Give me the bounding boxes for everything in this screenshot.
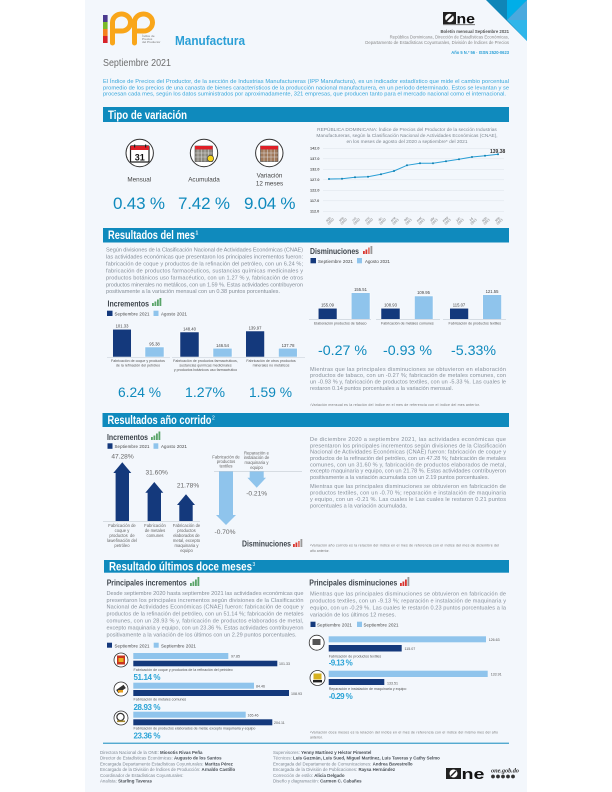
legend bbox=[108, 443, 188, 449]
arrow chart: accumulated decreases: equipo bbox=[250, 465, 263, 470]
section band: Tipo de variación bbox=[103, 107, 509, 122]
monthly increase values: 1.27% bbox=[185, 384, 225, 400]
arrow chart: accumulated decreases bbox=[212, 450, 302, 536]
text: twelve month decreases bbox=[310, 591, 507, 618]
legend: Septiembre 2021 bbox=[114, 312, 150, 316]
heading: Principales disminuciones: Principales disminuciones bbox=[309, 577, 397, 587]
line chart: price index: 137.0 bbox=[310, 157, 320, 161]
bar chart: twelve month increases: Fabricación de coque y productos de la refinación del petróleo bbox=[134, 668, 233, 672]
credits: left column: Director de Estadísticas Económicas: Augusto de los Santos bbox=[100, 756, 222, 761]
date: Septiembre 2021 bbox=[103, 58, 171, 69]
bar chart: monthly increases: sustancias químicas medicinales bbox=[179, 364, 232, 368]
credits: right column: Supervisores: Yenny Martínez y Héctor Pimentel bbox=[273, 750, 371, 755]
footnote 3 bbox=[310, 730, 498, 740]
line chart: price index: 117.0 bbox=[310, 199, 319, 203]
heading: Incrementos: Incrementos bbox=[108, 298, 149, 308]
line chart: price index: jun bbox=[455, 216, 461, 222]
bar chart: monthly decreases: 155.09 bbox=[321, 302, 335, 308]
bulletin information: República Dominicana, Dirección de Estadísticas Económicas, bbox=[390, 34, 509, 40]
monthly increase values bbox=[118, 384, 292, 400]
footnote 3: anterior. bbox=[310, 736, 323, 740]
text: accumulated results: y equipo, con un -0.21 %. Las cuales le Las cuales le restaron 0.21 puntos bbox=[310, 497, 506, 503]
arrow chart: accumulated decreases: Fabricación de bbox=[212, 454, 240, 460]
footnote 2 bbox=[310, 544, 499, 553]
monthly decrease values: -0.27 % bbox=[318, 342, 367, 358]
variation values: 7.42 % bbox=[178, 194, 230, 213]
line chart: price index: 2021 bbox=[392, 218, 400, 226]
line chart: price index: ene bbox=[390, 216, 397, 223]
text: monthly decreases: un -0.93 % y, fabricación de productos textiles, con un -5.33 %. Las cuales le bbox=[310, 380, 506, 386]
text: monthly increases: fabricación de productos farmacéuticos, sustancias químicas medicinales y bbox=[106, 269, 303, 275]
heading: Principales incrementos: Principales incrementos bbox=[107, 578, 187, 588]
bar chart: twelve month increases: 84.46 bbox=[256, 684, 265, 688]
text: monthly increases: las actividades económicas que presentaron los principales incrementos fueron: bbox=[106, 255, 303, 261]
legend bbox=[107, 311, 188, 316]
arrow chart: accumulated increases: productos de bbox=[109, 533, 135, 538]
bar chart: monthly increases: Fabricación de productos farmacéuticos, bbox=[173, 359, 238, 363]
text: twelve month increases: Nacional de Actividades Económicas (CNAE) fueron: fabricación de coque y bbox=[106, 605, 304, 611]
text: twelve month increases: excepto maquinaria y equipo, con un 23.36 %. Estas actividades contribuyeron bbox=[106, 625, 304, 631]
text: twelve month decreases: variación de los últimos 12 meses. bbox=[310, 612, 396, 618]
text: monthly decreases: restaron 0.14 puntos porcentuales a la variación mensual. bbox=[310, 386, 453, 392]
arrow chart: accumulated increases: productos bbox=[177, 528, 196, 533]
bar chart: monthly increases: de la refinación del petróleo bbox=[116, 364, 160, 368]
line chart: price index: jul bbox=[469, 217, 474, 222]
credits: right column: Encargada del Departamento de Comunicaciones: Andrea Bavestrello bbox=[273, 761, 413, 766]
heading: Disminuciones: Disminuciones bbox=[242, 539, 291, 549]
variation labels: Variación bbox=[257, 172, 283, 180]
bulletin information bbox=[365, 29, 510, 55]
variation labels: Mensual bbox=[127, 176, 151, 184]
text: twelve month increases: presentaron los principales incrementos según divisiones de la Clasificación bbox=[106, 598, 304, 604]
website and social icons: one.gob.do bbox=[491, 768, 519, 774]
bar chart: monthly increases: 137.78 bbox=[282, 343, 295, 348]
line chart: price index bbox=[310, 126, 506, 226]
line chart: price index: 2020 bbox=[366, 218, 374, 226]
arrow chart: accumulated increases: de metales bbox=[145, 528, 165, 533]
ONE logo bbox=[443, 10, 475, 26]
variation values: 0.43 % bbox=[113, 194, 165, 213]
line chart: price index: 2020 bbox=[353, 218, 361, 226]
line chart: price index: may bbox=[442, 216, 449, 223]
bar chart: monthly increases: 139.97 bbox=[249, 326, 262, 330]
footer ONE logo: ne bbox=[462, 766, 484, 783]
credits: left column: Coordinador de Estadísticas Coyunturales: bbox=[100, 773, 183, 778]
text: monthly decreases: productos de tabaco, con un -0.27 %; fabricación de metales comunes, con bbox=[310, 373, 506, 379]
text: accumulated results bbox=[310, 437, 507, 510]
bar chart: monthly increases: y productos botánicos uso farmacéutico bbox=[174, 368, 237, 372]
arrow chart: accumulated increases: Fabricación de bbox=[108, 523, 136, 528]
variation values bbox=[113, 194, 296, 213]
line chart: price index: en los meses de agosto del 2020 a septiembre* del 2021 bbox=[346, 139, 468, 145]
legend bbox=[310, 622, 399, 628]
section band: Resultados del mes bbox=[103, 228, 509, 242]
bar chart: twelve month increases: 23.36 % bbox=[134, 731, 160, 740]
legend: Septiembre 2021 bbox=[364, 623, 399, 628]
arrow chart: accumulated decreases: textiles bbox=[219, 464, 233, 469]
icon: falling bars bbox=[400, 577, 409, 586]
footnote 2: año anterior. bbox=[310, 549, 330, 553]
line chart: price index: 2021 bbox=[405, 218, 413, 226]
intro text: procesan cada mes, según los datos suministrados por aproximadamente, 321 empresas, que producen tanto para el mercado nacional como el internacional. bbox=[103, 92, 506, 98]
arrow chart: accumulated increases: Fabricación de bbox=[173, 523, 201, 528]
text: accumulated results: positivamente a la variación acumulada con un 2.19 puntos porcentuales. bbox=[310, 475, 489, 481]
bar chart: monthly increases: 148.40 bbox=[183, 326, 197, 332]
bar chart: twelve month decreases: 115.07 bbox=[404, 647, 415, 651]
section band: Resultado últimos doce meses: Resultado últimos doce meses bbox=[109, 559, 252, 573]
credits: right column: Encargada de la División de Publicaciones: Raysa Hernández bbox=[273, 767, 396, 772]
heading: Disminuciones: Disminuciones bbox=[310, 246, 359, 256]
legend: Agosto 2021 bbox=[161, 444, 188, 449]
bar chart: monthly increases: 146.54 bbox=[216, 343, 230, 348]
line chart: price index: 142.0 bbox=[310, 146, 320, 150]
arrow chart: accumulated increases: petróleo bbox=[114, 543, 130, 548]
line chart: price index: dic bbox=[377, 216, 383, 222]
bar chart: monthly decreases: 121.55 bbox=[486, 289, 499, 294]
bar chart: twelve month increases: 101.33 bbox=[279, 662, 290, 666]
credits: right column: Corrección de estilo: Alicia Delgado bbox=[273, 773, 345, 778]
footnote 3: ³Variación doce meses es la relación del índice en el mes de referencia con el índice del mismo mes del año bbox=[310, 730, 498, 734]
bar chart: monthly decreases: 108.93 bbox=[384, 302, 398, 308]
line chart: price index: 2021 bbox=[431, 218, 439, 226]
section band: Resultados del mes: Resultados del mes bbox=[108, 228, 195, 242]
credits: left column: Encargada Departamento Estadísticas Coyunturales: Maritza Pérez bbox=[100, 761, 234, 766]
bar chart: monthly decreases bbox=[309, 287, 506, 325]
icon: 12 month calendar bbox=[256, 139, 283, 167]
bar chart: monthly decreases: 155.51 bbox=[354, 287, 368, 292]
line chart: price index: feb bbox=[403, 216, 409, 222]
text: monthly increases bbox=[106, 248, 303, 295]
bar chart: twelve month increases: 108.93 bbox=[291, 692, 302, 696]
text: monthly increases: Según divisiones de la Clasificación Nacional de Actividades Económicas (CNAE) bbox=[106, 248, 303, 254]
section band: Resultado últimos doce meses bbox=[104, 559, 509, 573]
bar chart: monthly decreases: 115.07 bbox=[453, 302, 466, 308]
text: accumulated results: presentaron los principales incrementos según divisiones de la Clasificación bbox=[310, 443, 506, 449]
bar chart: monthly increases: 95.38 bbox=[149, 342, 160, 346]
icon: falling bars bbox=[363, 246, 372, 254]
bulletin information: Departamento de Estadísticas Coyunturales, División de Índices de Precios bbox=[365, 40, 509, 45]
line chart: price index: sep bbox=[494, 216, 501, 223]
text: accumulated results: productos de la refinación del petróleo, con un 47.28 %; fabricación de metales bbox=[310, 456, 506, 462]
footnote 2: ²Variación año corrido es la relación del índice en el mes de referencia con el índice del mes de diciembre del bbox=[310, 544, 499, 548]
text: accumulated results: De diciembre 2020 a septiembre 2021, las actividades económicas que bbox=[310, 437, 506, 443]
variation labels: 12 meses bbox=[256, 180, 283, 188]
heading: Incrementos: Incrementos bbox=[107, 432, 148, 442]
legend: Septiembre 2021 bbox=[114, 644, 150, 648]
bar chart: twelve month increases: 51.14 % bbox=[134, 673, 160, 682]
line chart: price index: Manufactureras, según la Clasificación Nacional de Actividades Económicas (CNAE), bbox=[316, 133, 498, 139]
text: monthly increases: fabricación de coque y productos de la refinación del petróleo, con un 6.24 %; bbox=[106, 262, 303, 268]
heading: Manufactura: Manufactura bbox=[175, 33, 246, 48]
bar chart: monthly decreases: Elaboración productos de tabaco bbox=[314, 321, 367, 325]
bar chart: twelve month decreases: -0.29 % bbox=[329, 692, 353, 701]
text: twelve month decreases: Mientras que las principales disminuciones se obtuvieron en fabricación de bbox=[310, 591, 506, 597]
text: twelve month increases bbox=[106, 591, 304, 638]
line chart: price index: 139.38 bbox=[490, 149, 506, 155]
arrow chart: accumulated increases: equipo bbox=[180, 548, 193, 553]
arrow chart: accumulated increases: elaborados de bbox=[173, 533, 200, 538]
credits: right column bbox=[273, 750, 440, 784]
text: twelve month increases: Desde septiembre 2020 hasta septiembre 2021 las actividades económicas que bbox=[106, 591, 304, 597]
bar chart: twelve month increases: 97.85 bbox=[231, 654, 240, 658]
bar chart: monthly decreases: Fabricación de productos textiles bbox=[448, 321, 501, 325]
section band: Resultados año corrido bbox=[102, 413, 509, 427]
arrow chart: accumulated increases: lawefinación del bbox=[107, 538, 137, 543]
line chart: price index: 127.0 bbox=[310, 178, 320, 182]
icon: rising bars bbox=[151, 432, 160, 440]
IPP logo: Índice de bbox=[142, 34, 155, 38]
legend: Agosto 2021 bbox=[365, 259, 391, 264]
legend: Septiembre 2021 bbox=[318, 259, 354, 264]
arrow chart: accumulated decreases: instalación de bbox=[244, 455, 270, 460]
IPP logo bbox=[103, 14, 160, 44]
arrow chart: accumulated increases bbox=[103, 453, 201, 553]
arrow chart: accumulated decreases: -0.21% bbox=[246, 491, 267, 498]
arrow chart: accumulated decreases: productos bbox=[217, 459, 235, 464]
variation labels bbox=[127, 172, 283, 188]
footnote 1: ¹Variación mensual es la relación del índice en el mes de referencia con el índice del mes anterior. bbox=[310, 403, 480, 407]
text: monthly decreases: Mientras que las principales disminuciones se obtuvieron en elaboración bbox=[310, 367, 506, 373]
arrow chart: accumulated increases: Fabricación bbox=[144, 523, 166, 528]
monthly decrease values: -0.93 % bbox=[383, 342, 432, 358]
line chart: price index: 2020 bbox=[379, 218, 387, 226]
IPP logo: Precios bbox=[142, 37, 153, 41]
section band: Resultados año corrido: Resultados año corrido bbox=[108, 413, 212, 427]
bar chart: twelve month decreases: Reparación e instalación de maquinaria y equipo bbox=[329, 687, 406, 691]
line chart: price index: 2021 bbox=[457, 218, 465, 226]
legend: Agosto 2021 bbox=[161, 312, 188, 316]
arrow chart: accumulated increases: 31.60% bbox=[146, 469, 168, 476]
arrow chart: accumulated increases: maquinaria y bbox=[175, 543, 199, 548]
legend: Septiembre 2021 bbox=[317, 623, 353, 628]
bar chart: monthly increases: Fabricación de otros productos bbox=[246, 359, 296, 363]
line chart: price index: ago bbox=[325, 216, 332, 223]
legend: Septiembre 2021 bbox=[114, 444, 150, 449]
legend bbox=[107, 643, 197, 648]
bar chart: twelve month decreases: 133.51 bbox=[387, 682, 398, 686]
arrow chart: accumulated decreases: -0.70% bbox=[215, 529, 236, 536]
line chart: price index: 122.0 bbox=[310, 188, 320, 192]
corner decoration bbox=[486, 0, 527, 41]
bar chart: twelve month decreases: 126.63 bbox=[489, 638, 500, 642]
icon: falling bars bbox=[293, 539, 302, 547]
line chart: price index: 2021 bbox=[418, 218, 426, 226]
text: twelve month decreases: productos textiles, con un -9.13 %; reparación e instalación de maquinaria y bbox=[310, 598, 506, 604]
line chart: price index: mar bbox=[416, 216, 423, 223]
footer ONE logo bbox=[446, 766, 484, 783]
IPP logo: del Productor bbox=[142, 40, 160, 44]
variation labels: Acumulada bbox=[188, 176, 220, 184]
line chart: price index: 2020 bbox=[327, 218, 335, 226]
section band: Resultados del mes: 1 bbox=[196, 230, 198, 236]
arrow chart: accumulated increases: 47.28% bbox=[111, 453, 134, 460]
bar chart: monthly increases bbox=[107, 324, 305, 372]
text: monthly increases: productos botánicos uso farmacéutico, con un 1.27 % y, fabricación de otros bbox=[106, 275, 303, 281]
text: accumulated results: comunes, con un 31.60 % y, fabricación de productos elaborados de metal, bbox=[310, 462, 506, 468]
bar chart: twelve month increases: Fabricación de metales comunes bbox=[134, 698, 186, 702]
line chart: price index: REPÚBLICA DOMINICANA: Índice de Precios del Productor de la sección Industrias bbox=[317, 126, 497, 133]
text: twelve month increases: comunes, con un 28.93 % y, fabricación de productos elaborados de metal, bbox=[106, 618, 304, 624]
intro text bbox=[103, 78, 509, 98]
monthly increase values: 6.24 % bbox=[118, 384, 161, 400]
text: twelve month increases: productos de la refinación del petróleo, con un 51.14 %; fabricación de metales bbox=[106, 611, 304, 617]
section band: Resultado últimos doce meses: 3 bbox=[252, 562, 256, 568]
monthly decrease values bbox=[318, 342, 496, 358]
line chart: price index: 132.0 bbox=[310, 168, 320, 172]
section band: Tipo de variación: Tipo de variación bbox=[108, 108, 187, 122]
bar chart: twelve month increases: 204.11 bbox=[274, 721, 285, 725]
bar chart: twelve month decreases bbox=[309, 635, 502, 701]
line chart: price index: sep bbox=[338, 216, 345, 223]
bar chart: twelve month increases: 28.93 % bbox=[134, 703, 160, 712]
icon: rising bars bbox=[190, 577, 199, 586]
line chart: price index: 2021 bbox=[470, 218, 478, 226]
arrow chart: accumulated increases: 21.78% bbox=[177, 483, 199, 490]
arrow chart: accumulated increases: metal, excepto bbox=[173, 538, 201, 543]
arrow chart: accumulated decreases: maquinaria y bbox=[245, 460, 269, 465]
arrow chart: accumulated increases: coque y bbox=[115, 528, 130, 533]
text: accumulated results: Nacional de Actividades Económicas (CNAE) fueron: fabricación de coque y bbox=[310, 450, 506, 456]
icon: rising bars bbox=[152, 298, 161, 306]
variation values: 9.04 % bbox=[244, 194, 296, 213]
line chart: price index: oct bbox=[351, 216, 357, 222]
page background bbox=[85, 0, 527, 792]
line chart: price index: 2021 bbox=[483, 218, 491, 226]
text: twelve month decreases: equipo, con un -0.29 %. Las cuales le restarón 0.23 puntos porcentuales a la bbox=[310, 605, 507, 611]
icon: monthly calendar: 31 bbox=[135, 152, 145, 162]
text: accumulated results: Mientras que las principales disminuciones se obtuvieron en fabricación de bbox=[310, 484, 506, 490]
text: monthly increases: positivamente a la variación mensual con un 0.38 puntos porcentuales. bbox=[106, 289, 280, 295]
text: accumulated results: porcentuales a la variación acumulada. bbox=[310, 504, 407, 510]
bar chart: twelve month decreases: Fabricación de productos textiles bbox=[329, 654, 381, 658]
bulletin information: Boletín mensual Septiembre 2021 bbox=[440, 29, 510, 34]
ONE logo: ne bbox=[456, 10, 475, 26]
credits: right column: Técnicos: Luis Guzmán, Luis Sued, Miguel Martínez, Luis Taveras y Cathy Selmo bbox=[273, 756, 440, 761]
credits: left column: Encargado de la División de Índices de Producción: Arnaldo Castillo bbox=[100, 767, 236, 772]
credits: left column: Analista: Starling Taveras bbox=[100, 778, 152, 784]
bar chart: monthly decreases: Fabricación de metales comunes bbox=[381, 321, 434, 325]
line chart: price index: 112.0 bbox=[310, 210, 319, 214]
line chart: price index: 2021 bbox=[496, 218, 504, 226]
line chart: price index: ago bbox=[481, 216, 488, 223]
line chart: price index: 2020 bbox=[340, 218, 348, 226]
arrow chart: accumulated increases: comunes bbox=[146, 533, 164, 538]
icon: monthly calendar bbox=[126, 139, 153, 167]
legend bbox=[310, 258, 391, 264]
text: accumulated results: productos textiles, con un -0.70 %; reparación e instalación de maquinaria bbox=[310, 490, 507, 496]
credits: left column bbox=[100, 750, 236, 784]
text: twelve month increases: positivamente a la variación de los últimos con un 2.29 puntos porcentuales. bbox=[106, 632, 297, 638]
text: monthly increases: productos minerales no metálicos, con un 1.59 %. Estas actividades contribuyeron bbox=[106, 282, 303, 288]
line chart: price index: nov bbox=[364, 216, 371, 223]
bar chart: twelve month increases bbox=[114, 653, 302, 740]
bar chart: twelve month decreases: 133.91 bbox=[491, 672, 502, 676]
bulletin information: Año 5 N.º 56 · ISSN 2520-0623 bbox=[451, 50, 510, 55]
bar chart: twelve month increases: Fabricación de productos elaborados de metal, excepto maquinaria y equipo bbox=[134, 727, 255, 731]
text: accumulated results: excepto maquinaria y equipo, con un 21.78 %. Estas actividades contribuyeron bbox=[310, 469, 506, 475]
line chart: price index: abr bbox=[429, 216, 435, 222]
section band: Resultados año corrido: 2 bbox=[212, 416, 215, 422]
intro text: El Índice de Precios del Productor, de la sección de Industrias Manufactureras (IPP Manufactura), es un indicador estadístico que mide el cambio porcentual bbox=[103, 78, 509, 85]
monthly decrease values: -5.33% bbox=[451, 342, 496, 358]
bar chart: twelve month decreases: -9.13 % bbox=[329, 659, 353, 668]
bar chart: twelve month increases: 165.46 bbox=[248, 714, 258, 718]
website and social icons bbox=[491, 768, 519, 778]
text: monthly decreases bbox=[310, 367, 506, 392]
icon: accumulated calendar bbox=[190, 139, 218, 167]
line chart: price index: 2021 bbox=[444, 218, 452, 226]
legend: Septiembre 2021 bbox=[161, 644, 197, 648]
intro text: promedio de los precios de una canasta de bienes característicos de la producción nacional manufacturera, en un período determinado. Estos se levantan y se bbox=[103, 85, 509, 91]
bar chart: monthly increases: minerales no metálicos bbox=[253, 364, 290, 368]
bar chart: monthly decreases: 109.95 bbox=[417, 290, 431, 295]
bar chart: monthly increases: 101.33 bbox=[116, 324, 129, 328]
monthly increase values: 1.59 % bbox=[249, 384, 292, 400]
footer rule bbox=[103, 743, 509, 744]
credits: right column: Diseño y diagramación: Carmen C. Cabañes bbox=[273, 778, 362, 784]
credits: left column: Directora Nacional de la ONE: Miosotis Rivas Peña bbox=[100, 750, 203, 755]
arrow chart: accumulated decreases: Reparación e bbox=[244, 450, 270, 456]
bar chart: monthly increases: Fabricación de coque y productos bbox=[111, 359, 165, 363]
